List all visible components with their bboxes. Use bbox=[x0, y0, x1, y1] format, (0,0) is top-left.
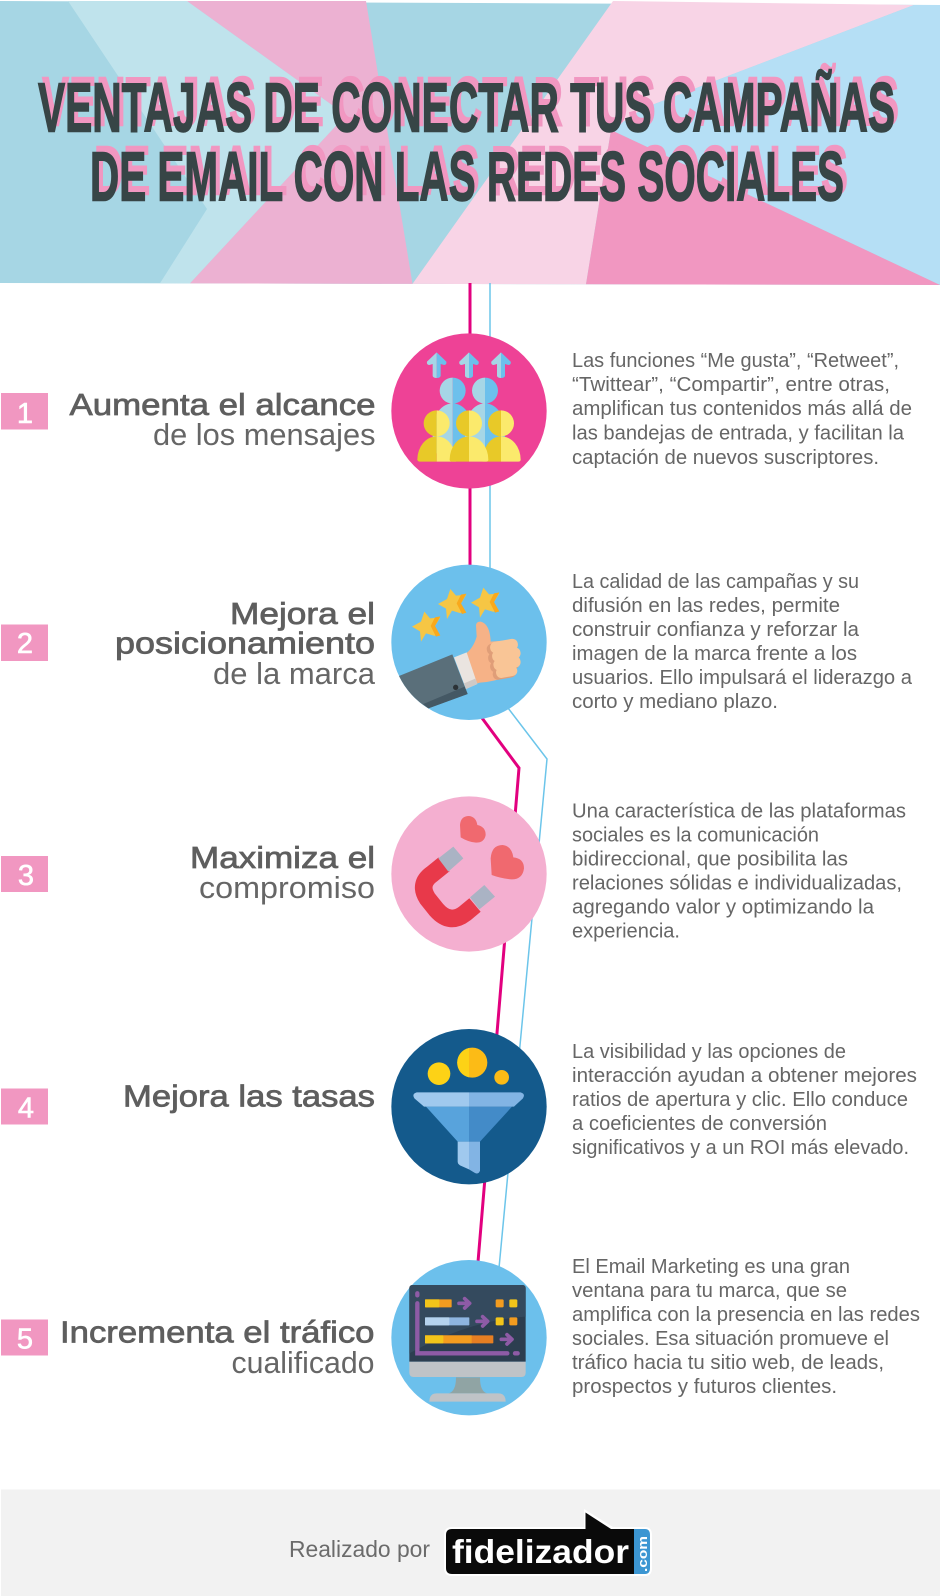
logo: fidelizador.com bbox=[444, 1509, 652, 1576]
item 1 text bbox=[572, 350, 912, 469]
item 1 text: Las funciones “Me gusta”, “Retweet”, bbox=[572, 350, 899, 372]
chart bars bbox=[425, 1299, 517, 1343]
item 5 heading: Incrementa el tráfico bbox=[60, 1314, 374, 1350]
item 5 text: tráfico hacia tu sitio web, de leads, bbox=[572, 1352, 884, 1374]
item 1 text: “Twittear”, “Compartir”, entre otras, bbox=[572, 374, 890, 396]
item 2 number: 2 bbox=[17, 628, 33, 660]
logo: fidelizador.com: fidelizador bbox=[452, 1533, 629, 1570]
item 3 icon: magnet with hearts bbox=[391, 796, 547, 952]
title bbox=[38, 62, 899, 216]
item 1 heading: Aumenta el alcance bbox=[70, 387, 376, 422]
item 3 number: 3 bbox=[18, 860, 34, 892]
item 1 heading: de los mensajes bbox=[153, 417, 376, 452]
item 5 text: sociales. Esa situación promueve el bbox=[572, 1328, 889, 1350]
item 5 number: 5 bbox=[17, 1324, 33, 1356]
item 4 text: interacción ayudan a obtener mejores bbox=[572, 1065, 917, 1087]
hand bbox=[465, 622, 521, 683]
front row people bbox=[417, 410, 521, 462]
item 4 text: a coeficientes de conversión bbox=[572, 1113, 827, 1135]
item 1 text: las bandejas de entrada, y facilitan la bbox=[572, 422, 905, 444]
arrows up bbox=[427, 352, 511, 378]
item 5 number bbox=[1, 1320, 48, 1356]
monitor bbox=[409, 1285, 526, 1402]
item 5 text bbox=[572, 1256, 920, 1398]
item 5 icon: monitor with charts bbox=[391, 1260, 547, 1415]
item 2 heading: de la marca bbox=[213, 656, 376, 691]
item 2 heading bbox=[115, 596, 376, 691]
header banner bbox=[0, 1, 940, 285]
item 1 icon: people with arrows bbox=[391, 333, 547, 489]
item 2 text bbox=[572, 571, 913, 713]
item 3 text: bidireccional, que posibilita las bbox=[572, 848, 848, 870]
item 4 text: ratios de apertura y clic. Ello conduce bbox=[572, 1089, 908, 1111]
logo: fidelizador.com: .com bbox=[635, 1536, 650, 1572]
footer bbox=[1, 1490, 940, 1596]
item 2 heading: posicionamiento bbox=[115, 626, 375, 660]
coins bbox=[428, 1048, 509, 1085]
item 3 text: relaciones sólidas e individualizadas, bbox=[572, 872, 902, 894]
item 3 heading: Maximiza el bbox=[190, 840, 375, 875]
item 2 text: usuarios. Ello impulsará el liderazgo a bbox=[572, 667, 913, 689]
item 1 number bbox=[1, 393, 48, 430]
item 1 heading bbox=[70, 387, 376, 452]
item 1 number: 1 bbox=[17, 398, 33, 430]
item 4 text bbox=[572, 1041, 917, 1159]
item 3 text bbox=[572, 800, 906, 942]
item 3 heading: compromiso bbox=[199, 870, 375, 905]
header background shapes bbox=[0, 1, 940, 285]
item 3 text: Una característica de las plataformas bbox=[572, 800, 906, 822]
item 3 text: experiencia. bbox=[572, 920, 680, 942]
item 2 heading: Mejora el bbox=[230, 596, 375, 631]
item 5 text: prospectos y futuros clientes. bbox=[572, 1376, 837, 1398]
item 3 text: sociales es la comunicación bbox=[572, 824, 819, 846]
hearts bbox=[460, 816, 524, 879]
item 5 text: El Email Marketing es una gran bbox=[572, 1256, 850, 1278]
chart axes bbox=[417, 1293, 518, 1353]
item 2 text: difusión en las redes, permite bbox=[572, 595, 840, 617]
item 4 heading: Mejora las tasas bbox=[123, 1078, 375, 1114]
item 4 number: 4 bbox=[18, 1092, 34, 1124]
item 2 text: imagen de la marca frente a los bbox=[572, 643, 857, 665]
sleeve bbox=[399, 652, 477, 708]
item 1 text: amplifican tus contenidos más allá de bbox=[572, 398, 912, 420]
item 3 text: agregando valor y optimizando la bbox=[572, 896, 875, 918]
item 3 heading bbox=[190, 840, 375, 905]
item 3 number bbox=[1, 856, 48, 892]
item 5 text: amplifica con la presencia en las redes bbox=[572, 1304, 920, 1326]
chart arrows bbox=[459, 1299, 512, 1344]
funnel bbox=[413, 1092, 524, 1173]
footer credit text: Realizado por bbox=[289, 1536, 430, 1562]
item 1 text: captación de nuevos suscriptores. bbox=[572, 447, 879, 469]
item 2 text: construir confianza y reforzar la bbox=[572, 619, 860, 641]
item 2 icon: thumbs up with stars bbox=[391, 565, 547, 720]
item 5 text: ventana para tu marca, que se bbox=[572, 1280, 847, 1302]
item 2 text: corto y mediano plazo. bbox=[572, 691, 778, 713]
item 5 heading: cualificado bbox=[232, 1345, 374, 1380]
item 4 text: La visibilidad y las opciones de bbox=[572, 1041, 846, 1063]
item 2 text: La calidad de las campañas y su bbox=[572, 571, 859, 593]
magnet bbox=[424, 847, 495, 918]
back row people bbox=[433, 378, 505, 453]
item 2 number bbox=[1, 624, 48, 661]
item 5 heading bbox=[60, 1314, 374, 1380]
item 4 text: significativos y a un ROI más elevado. bbox=[572, 1137, 909, 1159]
item 4 icon: funnel with coins bbox=[391, 1029, 547, 1184]
connecting lines bbox=[470, 283, 547, 1268]
item 4 number bbox=[1, 1088, 48, 1124]
stars bbox=[412, 588, 499, 642]
